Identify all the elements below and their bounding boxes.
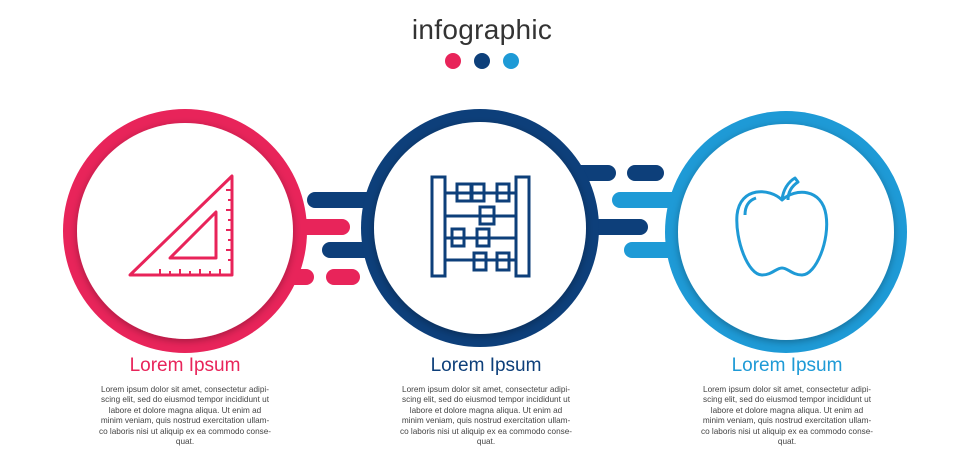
text: quat. (176, 437, 194, 446)
text: col 1 (99, 355, 271, 446)
text: minim veniam, quis nostrud exercitation ullam- (101, 416, 269, 425)
text: Lorem Ipsum (732, 355, 842, 376)
dots (445, 53, 519, 69)
text: Lorem Ipsum (431, 355, 541, 376)
circle middle (361, 109, 599, 347)
text: co laboris nisi ut aliquip ex ea commodo conse- (400, 427, 572, 436)
text: co laboris nisi ut aliquip ex ea commodo conse- (99, 427, 271, 436)
text: quat. (778, 437, 796, 446)
text: Lorem Ipsum (130, 355, 240, 376)
text: scing elit, sed do eiusmod tempor incididunt ut (703, 395, 871, 404)
circle left (63, 109, 307, 353)
connectors left (290, 200, 380, 277)
icon: abacus (432, 177, 529, 276)
text: Lorem ipsum dolor sit amet, consectetur adipi- (101, 385, 269, 394)
text: Lorem ipsum dolor sit amet, consectetur adipi- (703, 385, 871, 394)
circle right (665, 111, 907, 353)
text: quat. (477, 437, 495, 446)
icon: apple (737, 178, 827, 275)
text: minim veniam, quis nostrud exercitation ullam- (402, 416, 570, 425)
text: Lorem ipsum dolor sit amet, consectetur adipi- (402, 385, 570, 394)
text: minim veniam, quis nostrud exercitation ullam- (703, 416, 871, 425)
title: infographic (412, 14, 552, 45)
text: labore et dolore magna aliqua. Ut enim ad (109, 406, 261, 415)
icon: set square (130, 176, 232, 275)
text: labore et dolore magna aliqua. Ut enim ad (711, 406, 863, 415)
text: co laboris nisi ut aliquip ex ea commodo conse- (701, 427, 873, 436)
text: scing elit, sed do eiusmod tempor incididunt ut (402, 395, 570, 404)
text: col 3 (701, 355, 873, 446)
connectors right (580, 173, 690, 250)
text: labore et dolore magna aliqua. Ut enim ad (410, 406, 562, 415)
text: col 2 (400, 355, 572, 446)
text: scing elit, sed do eiusmod tempor incididunt ut (101, 395, 269, 404)
